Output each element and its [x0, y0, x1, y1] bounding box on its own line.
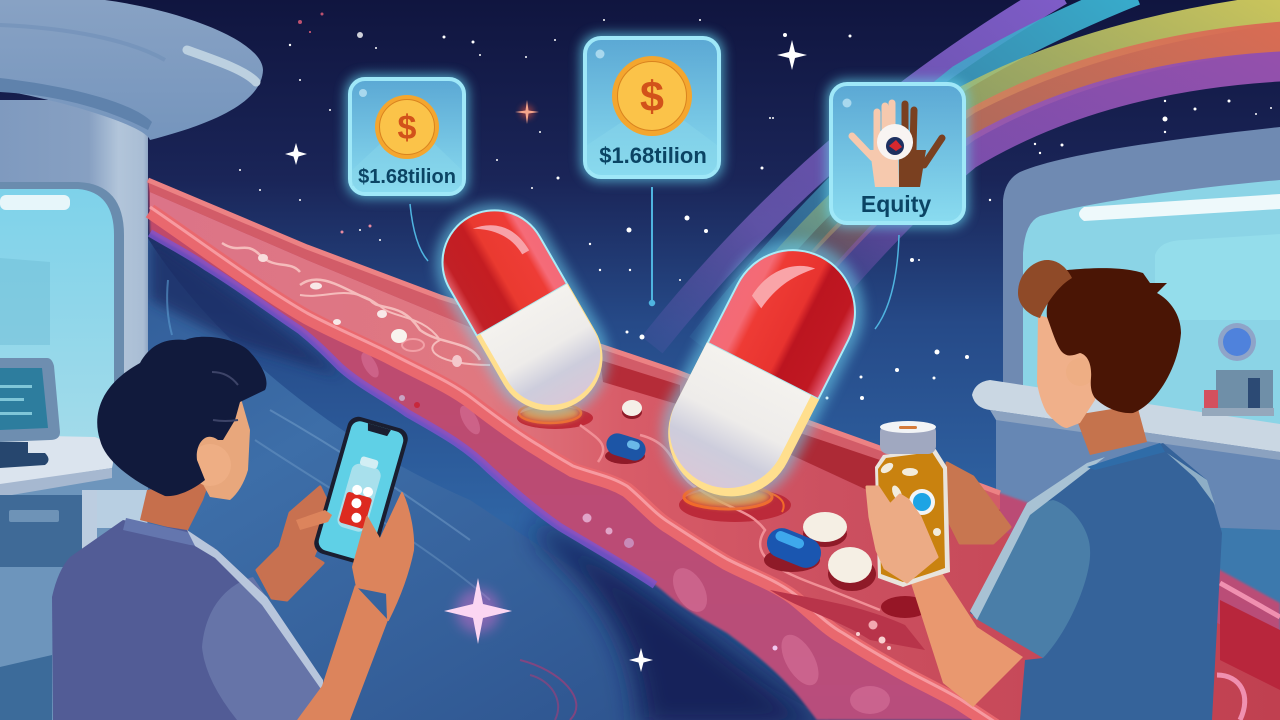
front hand on bottle — [867, 487, 937, 582]
back arm — [257, 487, 332, 600]
left lab building — [0, 0, 263, 720]
large capsule right — [638, 216, 888, 526]
small pills on artery — [604, 400, 876, 591]
shirt — [970, 443, 1222, 720]
shirt — [52, 520, 323, 720]
forearm — [910, 570, 1023, 707]
icon: diverse hands holding pill — [852, 103, 942, 187]
icon: coin: $ — [398, 109, 417, 147]
card: equity: Equity — [861, 191, 931, 217]
back hand — [947, 463, 1010, 543]
monitor — [0, 358, 60, 468]
person left with phone — [52, 337, 388, 720]
large capsule left — [414, 182, 630, 438]
artery purple underside — [150, 233, 655, 585]
card: cost two: $1.68tilion — [599, 143, 707, 168]
card: cost one — [346, 75, 468, 198]
face — [1037, 315, 1095, 428]
hair — [97, 337, 267, 496]
right lab building — [972, 127, 1280, 640]
phone — [312, 414, 410, 568]
card: cost one: $1.68tilion — [358, 166, 456, 188]
front hand on phone — [353, 493, 413, 620]
hair — [1047, 268, 1181, 413]
right artery channel — [1220, 600, 1280, 690]
pill base glows — [519, 403, 784, 512]
forearm — [297, 585, 388, 720]
artery front lip — [150, 211, 995, 720]
lab device — [1202, 323, 1274, 416]
medicine bottle — [875, 421, 950, 587]
artery wall texture — [358, 350, 890, 714]
head — [195, 395, 250, 500]
icon: coin — [612, 56, 692, 136]
card: cost two — [581, 34, 723, 181]
person right with bottle — [910, 260, 1222, 720]
artery back wall — [148, 180, 1000, 530]
hair bun — [1018, 260, 1072, 318]
card: equity — [827, 80, 968, 227]
neck — [140, 480, 210, 532]
artery — [148, 180, 1280, 720]
connector lines — [410, 187, 899, 329]
stars — [239, 12, 1272, 400]
artery squiggles — [222, 243, 480, 360]
fingers on phone — [296, 510, 332, 530]
sparkles — [285, 40, 807, 672]
artery upper surface — [150, 192, 1280, 720]
rainbow — [652, 0, 1280, 345]
artery outer wall — [148, 180, 1280, 720]
artery dark pools — [517, 407, 593, 429]
blue swirl lower left — [0, 225, 830, 720]
icon: coin: $ — [640, 73, 664, 121]
neck — [1075, 405, 1147, 455]
